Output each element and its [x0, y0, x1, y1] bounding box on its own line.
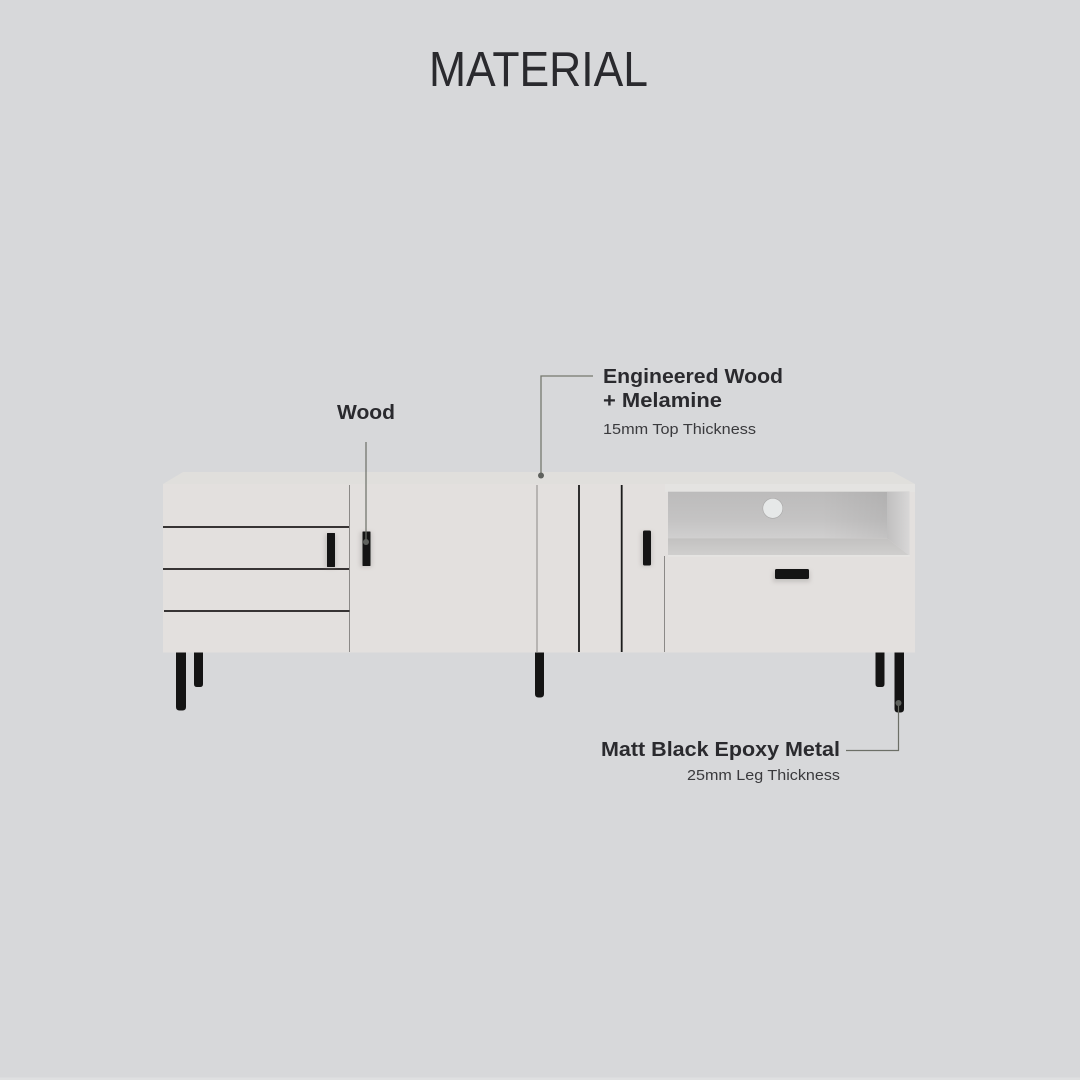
callout heading: engineered wood: Engineered Wood [603, 366, 783, 388]
handles [327, 530, 809, 579]
handle shadows [325, 532, 810, 582]
cable hole [763, 498, 783, 518]
callout: wood [337, 402, 395, 545]
leader line: metal [846, 703, 898, 750]
leader line: wood [365, 442, 367, 542]
callout: matt black epoxy metal [601, 700, 902, 784]
callout detail: leg thickness: 25mm Leg Thickness [687, 767, 840, 784]
callout detail: top thickness: 15mm Top Thickness [603, 421, 756, 438]
cabinet top surface [163, 472, 915, 484]
cabinet front [163, 484, 915, 652]
title: MATERIAL [429, 43, 648, 97]
right section front lip [665, 484, 915, 492]
callout heading: engineered wood: + Melamine [603, 390, 722, 412]
leader dot: wood [363, 539, 369, 545]
leader dot: engineered wood [538, 472, 544, 478]
callout: engineered wood [538, 366, 783, 478]
sideboard illustration [163, 472, 915, 712]
callout label: wood: Wood [337, 402, 395, 424]
callout heading: metal: Matt Black Epoxy Metal [601, 739, 840, 761]
leader line: engineered wood [541, 376, 593, 475]
callout heading: engineered wood [603, 366, 783, 412]
legs [176, 652, 904, 712]
door and drawer seams [163, 485, 664, 652]
open shelf niche [668, 492, 910, 556]
leader dot: metal [896, 700, 902, 706]
